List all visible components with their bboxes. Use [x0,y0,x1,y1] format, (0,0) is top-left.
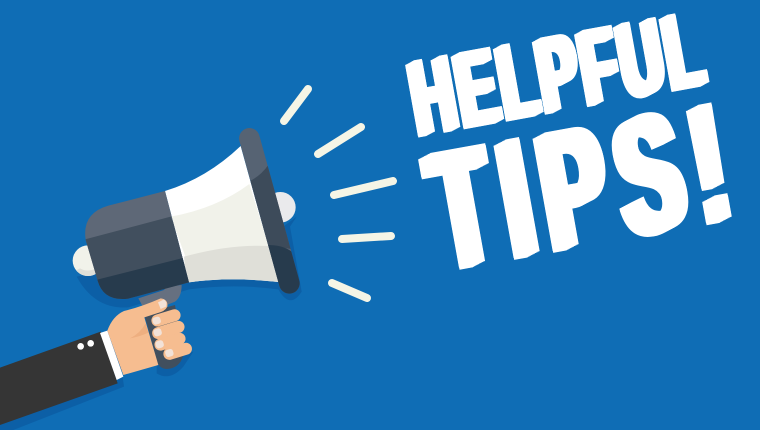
palm crease [130,323,148,338]
megaphone body [85,191,189,299]
finger nails [152,316,174,358]
megaphone horn [165,146,278,282]
sleeve buttons [77,340,94,350]
megaphone handle [138,285,183,369]
thumb nail [158,299,167,309]
shirt cuff [100,331,123,380]
sound rays [284,89,393,298]
heading: TIPS!: TIPS! [417,68,754,305]
palm and thumb [107,298,167,375]
fingers [150,308,193,361]
megaphone [70,123,307,369]
megaphone rim [239,128,300,294]
sleeve [0,332,118,425]
hand and arm [0,298,193,425]
megaphone rear knob [72,246,96,276]
drop shadow [0,217,302,430]
megaphone front knob [265,192,296,223]
illustration: hand holding megaphone [0,123,307,430]
